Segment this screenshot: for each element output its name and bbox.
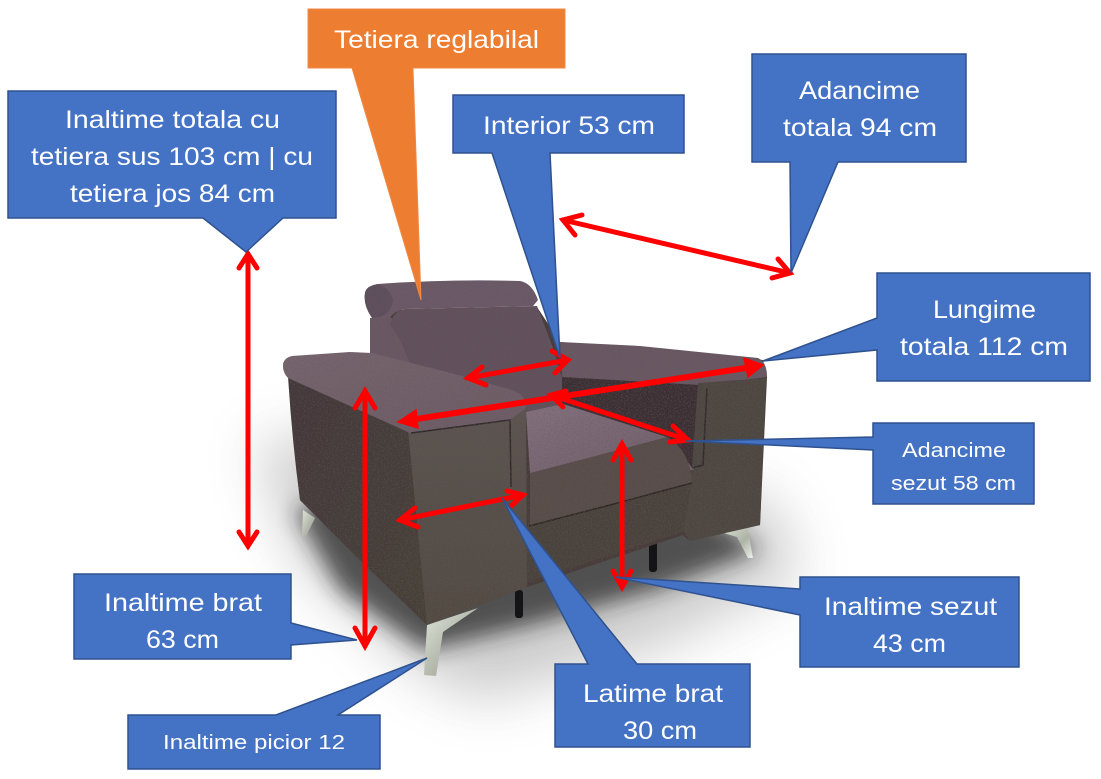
callout: arm width: 30 cm [623,717,697,745]
armchair photo [283,280,767,625]
silhouette base [283,307,767,625]
callout: total length: totala 112 cm [900,333,1068,361]
callout: total depth [752,54,966,273]
backrest and headrest [365,280,564,412]
callout: total length [763,273,1090,381]
callout: seat depth: sezut 58 cm [891,473,1016,495]
callout: seat depth [686,423,1034,504]
callout: total height: tetiera sus 103 cm | cu [31,143,313,171]
arrow: arm height [355,391,375,646]
arrow: total depth [563,215,790,278]
callout: total depth: totala 94 cm [783,114,937,142]
callout: adjustable headrest [308,9,565,300]
callout: total length: Lungime [933,296,1036,324]
callout: arm width: Latime brat [583,680,723,708]
arrow: seat depth [551,391,688,442]
callout: seat height: 43 cm [873,630,946,658]
callout: seat depth: Adancime [902,440,1006,462]
callout: total height: Inaltime totala cu [65,106,280,134]
arrow: seat height [613,444,631,587]
callout: arm width [502,498,750,747]
callout: total height [8,91,336,252]
callout: seat height: Inaltime sezut [824,593,997,621]
armchair legs [302,510,753,676]
arrow: total height [239,254,257,546]
arrow: interior [468,351,568,385]
arrow: total length [398,358,763,428]
arrow: arm width [400,491,523,527]
left arm [283,352,527,625]
callout: interior: Interior 53 cm [483,112,655,140]
callout: interior [453,95,684,358]
callout: arm height [74,574,357,659]
callout: total height: tetiera jos 84 cm [70,180,275,208]
seat [526,404,694,582]
callout: adjustable headrest: Tetiera reglabilal [334,26,539,54]
callout: arm height: Inaltime brat [104,589,262,617]
callout: leg height: Inaltime picior 12 [163,732,345,754]
callout: arm height: 63 cm [146,626,219,654]
dimension arrows [239,215,790,646]
callout: total depth: Adancime [799,77,920,105]
floor shadow [255,440,800,700]
callout: seat height [615,577,1019,667]
callout: leg height [128,658,427,769]
right arm [560,342,767,541]
